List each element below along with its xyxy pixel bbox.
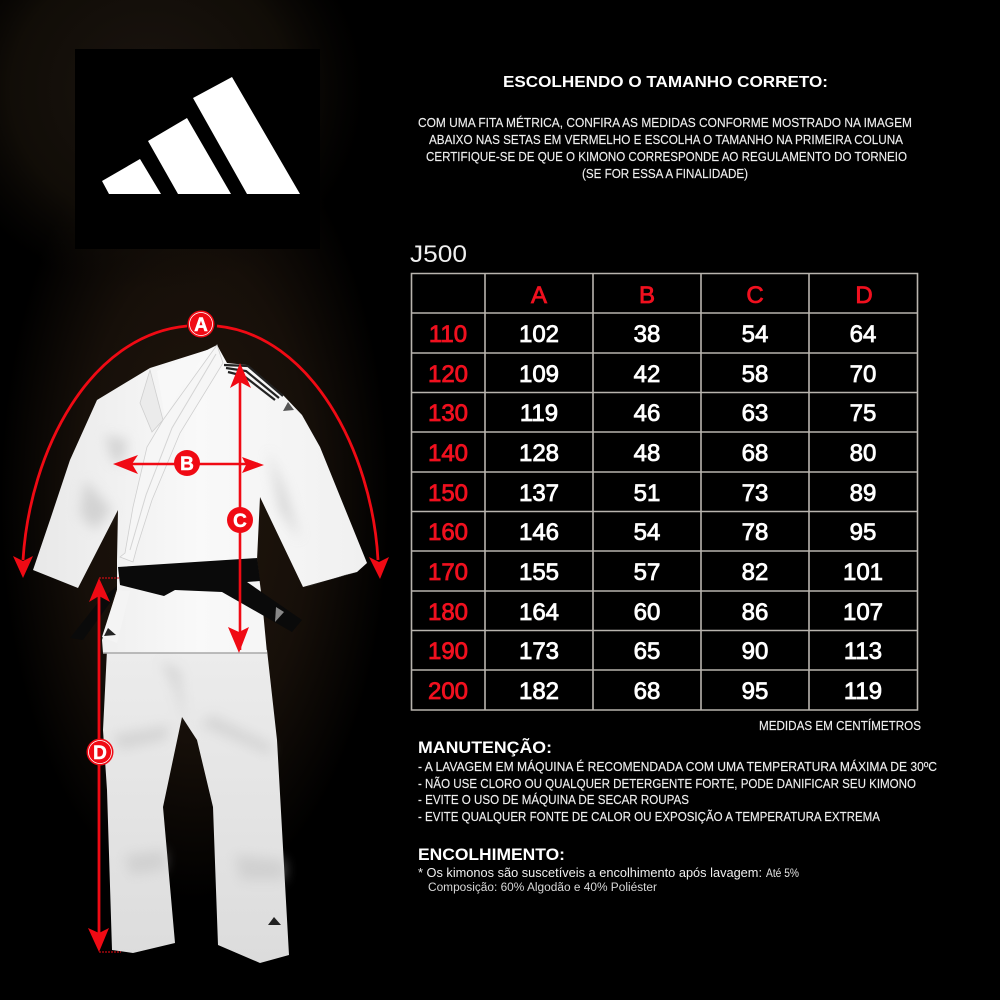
row 200: [428, 678, 882, 705]
row 120: 120: [428, 361, 468, 388]
badge C: [227, 507, 253, 533]
product name: J500: [410, 241, 467, 268]
row 170: 101: [843, 559, 883, 586]
row 140: 128: [519, 440, 559, 467]
row 130: 63: [742, 400, 768, 427]
row 180: [428, 599, 883, 626]
header row: C: [746, 282, 764, 309]
intro paragraph: ABAIXO NAS SETAS EM VERMELHO E ESCOLHA O TAMANHO NA PRIMEIRA COLUNA: [429, 132, 903, 147]
row 190: 173: [519, 638, 559, 665]
row 190: 90: [742, 638, 768, 665]
row 140: [428, 440, 876, 467]
shoulder stripes: [224, 365, 283, 400]
background glow behind kimono: [0, 100, 420, 1000]
row 160: 160: [428, 519, 468, 546]
arrow A: arc over shoulders: [13, 326, 389, 579]
lapel below belt: [102, 590, 130, 643]
shrinkage section: [418, 845, 799, 894]
row 110: 64: [850, 321, 876, 348]
logo panel: [75, 49, 320, 249]
badge B: [174, 450, 200, 476]
row 170: 155: [519, 559, 559, 586]
shrinkage note: * Os kimonos são suscetíveis a encolhimento após lavagem:: [418, 866, 762, 880]
icon: belt logo: [275, 607, 284, 622]
row 110: 110: [429, 321, 467, 348]
row 130: [428, 400, 876, 427]
row 130: 75: [850, 400, 876, 427]
row 200: 119: [844, 678, 882, 705]
row 170: 82: [742, 559, 768, 586]
badge A: [188, 310, 214, 338]
intro paragraph: CERTIFIQUE-SE DE QUE O KIMONO CORRESPONDE AO REGULAMENTO DO TORNEIO: [426, 149, 907, 164]
arrow C: jacket length: [228, 363, 251, 653]
badge A: A: [194, 315, 208, 336]
measurement arrows: [13, 310, 389, 952]
badge D: [86, 738, 114, 766]
maintenance instructions: - A LAVAGEM EM MÁQUINA É RECOMENDADA COM UMA TEMPERATURA MÁXIMA DE 30ºC: [418, 759, 937, 774]
row 200: 200: [428, 678, 468, 705]
shrinkage value: Até 5%: [766, 868, 799, 880]
row 160: 95: [850, 519, 876, 546]
maintenance instructions: - EVITE O USO DE MÁQUINA DE SECAR ROUPAS: [418, 792, 689, 807]
intro paragraph: [418, 115, 912, 181]
fabric composition: Composição: 60% Algodão e 40% Poliéster: [428, 882, 657, 894]
row 120: 42: [634, 361, 660, 388]
header row: A: [531, 282, 547, 309]
maintenance heading: MANUTENÇÃO:: [418, 737, 552, 757]
row 160: 146: [519, 519, 559, 546]
row 150: [428, 480, 876, 507]
badge C: C: [233, 511, 247, 532]
row 180: 60: [634, 599, 660, 626]
row 190: [428, 638, 882, 665]
row 120: 58: [742, 361, 768, 388]
row 170: 57: [634, 559, 660, 586]
row 120: [428, 361, 876, 388]
row 140: 48: [634, 440, 660, 467]
arrow D: pants length: [88, 578, 121, 952]
row 130: 130: [428, 400, 468, 427]
row 190: 190: [428, 638, 468, 665]
row 160: 54: [634, 519, 660, 546]
kimono illustration: [33, 345, 367, 963]
row 180: 107: [843, 599, 883, 626]
row 120: 70: [850, 361, 876, 388]
row 180: 164: [519, 599, 559, 626]
title: ESCOLHENDO O TAMANHO CORRETO:: [503, 74, 828, 91]
maintenance instructions: - NÃO USE CLORO OU QUALQUER DETERGENTE FORTE, PODE DANIFICAR SEU KIMONO: [418, 776, 916, 791]
black belt: [70, 558, 302, 643]
row 140: 68: [742, 440, 768, 467]
intro paragraph: (SE FOR ESSA A FINALIDADE): [582, 166, 748, 181]
row 180: 86: [742, 599, 768, 626]
row 150: 137: [519, 480, 559, 507]
jacket hem shadow: [103, 652, 267, 654]
top-left dark haze: [0, 0, 370, 300]
inner neck: [157, 350, 207, 418]
row 200: 182: [519, 678, 559, 705]
size table: [412, 274, 918, 710]
row 140: 140: [428, 440, 468, 467]
row 110: 54: [742, 321, 768, 348]
header row: D: [855, 282, 873, 309]
row 190: 65: [634, 638, 660, 665]
header row: B: [639, 282, 655, 309]
row 160: [428, 519, 876, 546]
row 200: 95: [742, 678, 768, 705]
intro paragraph: COM UMA FITA MÉTRICA, CONFIRA AS MEDIDAS CONFORME MOSTRADO NA IMAGEM: [418, 115, 912, 130]
row 150: 89: [850, 480, 876, 507]
icon: sleeve logo: [283, 402, 294, 411]
maintenance instructions: [418, 759, 937, 824]
row 130: 46: [634, 400, 660, 427]
sleeve cuff shadow: [305, 572, 357, 587]
row 200: 68: [634, 678, 660, 705]
row 180: 180: [428, 599, 468, 626]
row 170: 170: [428, 559, 468, 586]
row 120: 109: [519, 361, 559, 388]
icon: three stripes logo: [102, 77, 300, 194]
row 110: 102: [519, 321, 559, 348]
kimono jacket: [33, 345, 367, 653]
units note: MEDIDAS EM CENTÍMETROS: [759, 718, 921, 733]
maintenance section: [418, 737, 937, 824]
row 150: 150: [428, 480, 468, 507]
header row: [531, 282, 873, 309]
badge D: D: [93, 743, 107, 764]
row 140: 80: [850, 440, 876, 467]
table grid: [412, 274, 918, 710]
maintenance instructions: - EVITE QUALQUER FONTE DE CALOR OU EXPOSIÇÃO A TEMPERATURA EXTREMA: [418, 809, 880, 824]
row 190: 113: [844, 638, 882, 665]
icon: pants logo: [268, 917, 281, 925]
row 150: 73: [742, 480, 768, 507]
arrow B: chest width: [113, 455, 264, 474]
badge B: B: [180, 454, 194, 475]
row 110: [429, 321, 876, 348]
shrinkage heading: ENCOLHIMENTO:: [418, 845, 565, 864]
left collar: [140, 370, 163, 432]
row 130: 119: [520, 400, 558, 427]
kimono pants: [103, 650, 289, 963]
row 170: [428, 559, 883, 586]
row 160: 78: [742, 519, 768, 546]
jacket lapel: [120, 345, 223, 562]
row 110: 38: [634, 321, 660, 348]
row 150: 51: [634, 480, 660, 507]
icon: hem logo: [104, 628, 116, 636]
